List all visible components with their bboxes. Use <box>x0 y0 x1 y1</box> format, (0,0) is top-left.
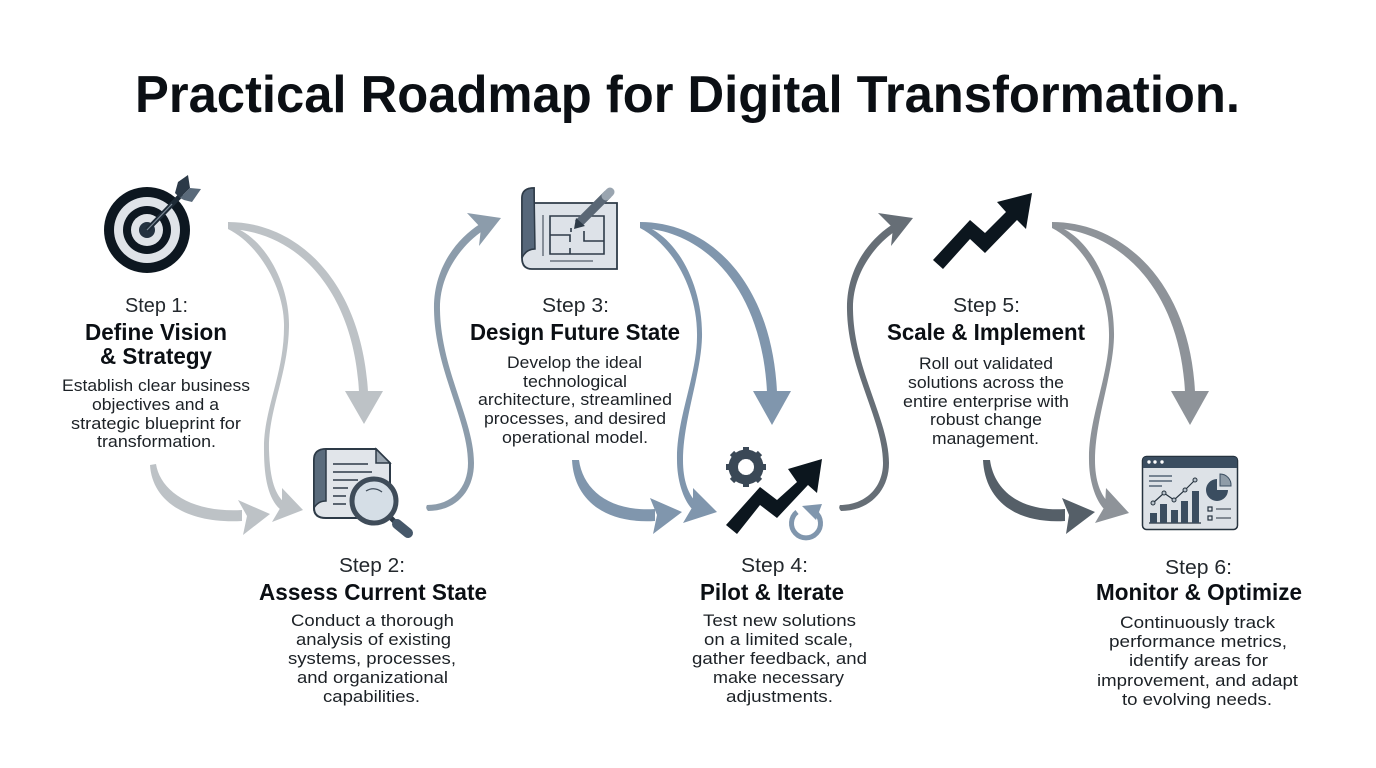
step 2 text: analysis of existing <box>296 630 451 649</box>
step 1 text: Define Vision <box>85 319 227 345</box>
step 3 text: operational model. <box>502 428 648 447</box>
icon: blueprint with pencil <box>522 188 617 269</box>
step 1 text: objectives and a <box>92 395 220 414</box>
step 5 text: Roll out validated <box>919 354 1053 373</box>
step 6 text: performance metrics, <box>1109 632 1287 651</box>
step 3 text <box>470 294 680 447</box>
arrows: step 5 to step 6 <box>983 222 1209 534</box>
arrows: step 3 to step 4 <box>572 222 791 534</box>
step 2 text: Assess Current State <box>259 579 487 605</box>
step 2 text: systems, processes, <box>288 649 456 668</box>
step 4 text <box>692 554 867 706</box>
step 2 text <box>259 554 487 706</box>
step 2 text: and organizational <box>297 668 448 687</box>
step 5 text: Scale & Implement <box>887 319 1085 345</box>
step 2 text: Conduct a thorough <box>291 611 454 630</box>
step 5 text <box>887 294 1085 448</box>
icon: document with magnifier <box>314 449 408 533</box>
arrow: step 2 to step 3 <box>426 213 501 511</box>
step 6 text: to evolving needs. <box>1122 690 1272 709</box>
step 2 text: Step 2: <box>339 554 405 577</box>
step 4 text: on a limited scale, <box>704 630 853 649</box>
step 6 text: Step 6: <box>1165 556 1232 579</box>
step 1 text: transformation. <box>97 432 216 451</box>
step 5 text: management. <box>932 429 1039 448</box>
arrows: step 1 to step 2 <box>150 222 383 535</box>
step 4 text: gather feedback, and <box>692 649 867 668</box>
icon: analytics dashboard <box>1142 456 1238 530</box>
step 4 text: Test new solutions <box>703 611 856 630</box>
step 3 text: Step 3: <box>542 294 609 317</box>
step 4 text: adjustments. <box>726 687 833 706</box>
step 1 text: Establish clear business <box>62 376 250 395</box>
step 5 text: robust change <box>930 410 1042 429</box>
icon: rising arrow <box>933 193 1032 269</box>
icon: gear, rising arrow and refresh <box>726 447 822 538</box>
step 4 text: Step 4: <box>741 554 808 577</box>
step 2 text: capabilities. <box>323 687 420 706</box>
step 1 text: strategic blueprint for <box>71 414 241 433</box>
step 6 text: Monitor & Optimize <box>1096 579 1302 605</box>
step 1 text: & Strategy <box>100 343 212 369</box>
arrow: step 4 to step 5 <box>839 213 913 511</box>
step 1 text: Step 1: <box>125 294 188 317</box>
step 6 text: Continuously track <box>1120 613 1276 632</box>
step 5 text: Step 5: <box>953 294 1020 317</box>
step 3 text: architecture, streamlined <box>478 390 672 409</box>
step 3 text: technological <box>523 372 627 391</box>
step 5 text: entire enterprise with <box>903 392 1069 411</box>
step 3 text: processes, and desired <box>484 409 666 428</box>
step 5 text: solutions across the <box>908 373 1064 392</box>
step 1 text <box>62 294 250 451</box>
step 4 text: Pilot & Iterate <box>700 579 844 605</box>
step 6 text: identify areas for <box>1129 651 1268 670</box>
step 3 text: Design Future State <box>470 319 680 345</box>
step 6 text: improvement, and adapt <box>1097 671 1298 690</box>
title: Practical Roadmap for Digital Transformation. <box>135 66 1240 124</box>
step 4 text: make necessary <box>713 668 845 687</box>
icon: target with arrow <box>104 175 201 273</box>
step 6 text <box>1096 556 1302 709</box>
step 3 text: Develop the ideal <box>507 353 642 372</box>
